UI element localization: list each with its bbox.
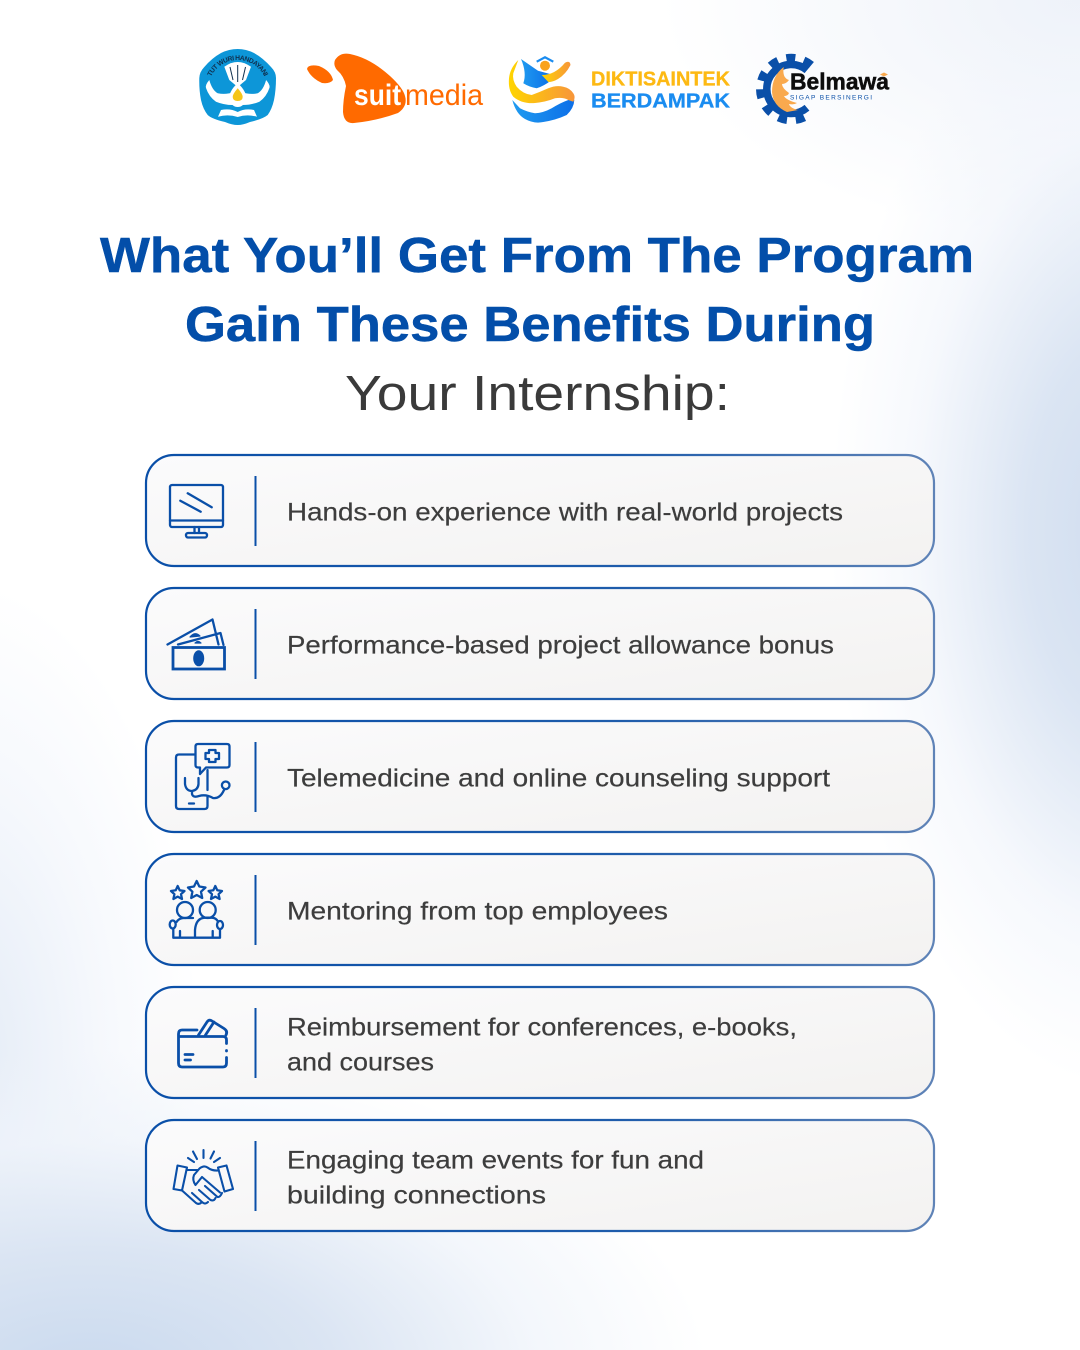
card text: Reimbursement for conferences, e-books, [287,1014,797,1042]
logo: Diktisaintek Berdampak [509,57,730,123]
title line 1: What You’ll Get From The Program [100,229,974,283]
card: project allowance bonus [146,588,934,699]
logo: Tut Wuri Handayani: TUT WURI HANDAYANI [206,55,268,76]
logo: Diktisaintek Berdampak: DIKTISAINTEK [591,68,730,90]
logo: suitmedia [307,54,483,123]
card text: Engaging team events for fun and [287,1146,704,1174]
icon: banknotes [168,620,224,669]
logo: Diktisaintek Berdampak: BERDAMPAK [591,90,730,112]
card text: Hands-on experience with real-world projects [287,498,843,526]
icon: handshake [174,1150,233,1204]
icon: wallet [178,1020,227,1067]
icon: phone with stethoscope [176,744,230,809]
card: reimbursement [146,987,934,1098]
card text: Mentoring from top employees [287,898,668,926]
card: telemedicine [146,721,934,832]
card text: and courses [287,1048,434,1076]
logo: Belmawa [760,58,889,121]
logo: Belmawa: SIGAP BERSINERGI [790,95,872,102]
card text [287,1146,704,1210]
card text: Performance-based project allowance bonus [287,632,834,660]
logo: suitmedia: suit [354,79,401,112]
icon: monitor [170,485,223,538]
logo: suitmedia: media [405,79,483,112]
card: team events [146,1120,934,1231]
card: hands-on experience [146,455,934,566]
card text: building connections [287,1182,546,1210]
card text: Telemedicine and online counseling support [287,764,830,792]
card text [287,1014,797,1076]
card: mentoring [146,854,934,965]
title line 3: Your Internship: [345,367,730,421]
icon: two people with stars [170,881,223,938]
swoosh mark [509,57,575,123]
logo row [199,49,890,125]
title line 2: Gain These Benefits During [185,298,875,352]
logo: Belmawa: Belmawa [790,69,889,95]
logo: Tut Wuri Handayani [199,49,276,125]
title [100,229,974,421]
